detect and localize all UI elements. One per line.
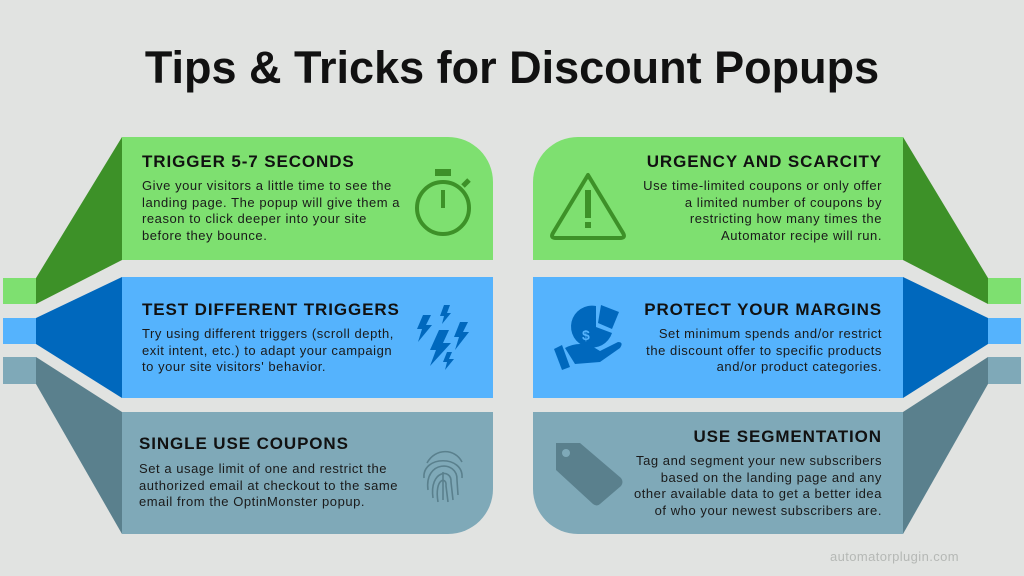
panel 4 text: a limited number of coupons by bbox=[685, 194, 882, 210]
panel 6 text: other available data to get a better idea bbox=[634, 486, 882, 501]
panel 4 text: restricting how many times the bbox=[690, 211, 882, 226]
panel 5 text bbox=[644, 300, 882, 374]
footer: automatorplugin.com bbox=[830, 549, 959, 564]
panel 6 text: based on the landing page and any bbox=[661, 470, 882, 484]
panel 5 text: Set minimum spends and/or restrict bbox=[659, 326, 882, 341]
panel 3 text: SINGLE USE COUPONS bbox=[139, 434, 349, 453]
panel 2 text: exit intent, etc.) to adapt your campaign bbox=[142, 342, 392, 358]
panel 2 text: TEST DIFFERENT TRIGGERS bbox=[142, 300, 400, 319]
panel 6 text: USE SEGMENTATION bbox=[693, 427, 882, 446]
panel shapes left bbox=[3, 137, 493, 534]
panel shapes right bbox=[533, 137, 1021, 534]
panel 4 text: URGENCY AND SCARCITY bbox=[647, 152, 882, 171]
panel 1 text: TRIGGER 5-7 SECONDS bbox=[142, 152, 355, 171]
icon: lightning bbox=[417, 305, 469, 370]
panel 2 text bbox=[142, 300, 400, 374]
panel 6 text bbox=[634, 427, 882, 518]
panel 1 text bbox=[142, 152, 400, 242]
icon: warning bbox=[552, 175, 624, 238]
panel 6 text: Tag and segment your new subscribers bbox=[636, 453, 882, 468]
panel 3 text: authorized email at checkout to the same bbox=[139, 478, 398, 492]
panel 1 text: before they bounce. bbox=[142, 228, 267, 242]
panel 6 text: of who your newest subscribers are. bbox=[655, 502, 882, 518]
icon: stopwatch bbox=[417, 171, 469, 234]
panel 5 text: PROTECT YOUR MARGINS bbox=[644, 300, 882, 319]
icon: fingerprint bbox=[424, 452, 462, 502]
panel 1 text: landing page. The popup will give them a bbox=[142, 194, 400, 210]
panel 3 text: Set a usage limit of one and restrict the bbox=[139, 461, 387, 476]
title: Tips & Tricks for Discount Popups bbox=[145, 42, 879, 93]
panel 5 text: and/or product categories. bbox=[717, 359, 882, 374]
panel 1 text: reason to click deeper into your site bbox=[142, 211, 367, 226]
icon: hand money bbox=[554, 305, 622, 370]
panel 3 text bbox=[139, 434, 398, 509]
panel 4 text bbox=[643, 152, 882, 242]
icon: hand money: $ bbox=[582, 327, 590, 343]
panel 2 text: Try using different triggers (scroll depth, bbox=[142, 326, 394, 341]
panel 4 text: Use time-limited coupons or only offer bbox=[643, 178, 882, 193]
panel 1 text: Give your visitors a little time to see the bbox=[142, 178, 392, 193]
panel 5 text: the discount offer to specific products bbox=[646, 342, 882, 358]
panel 2 text: to your site visitors' behavior. bbox=[142, 359, 326, 374]
panel 3 text: email from the OptinMonster popup. bbox=[139, 494, 365, 509]
panel 4 text: Automator recipe will run. bbox=[721, 228, 882, 242]
icon: tag bbox=[556, 443, 622, 506]
